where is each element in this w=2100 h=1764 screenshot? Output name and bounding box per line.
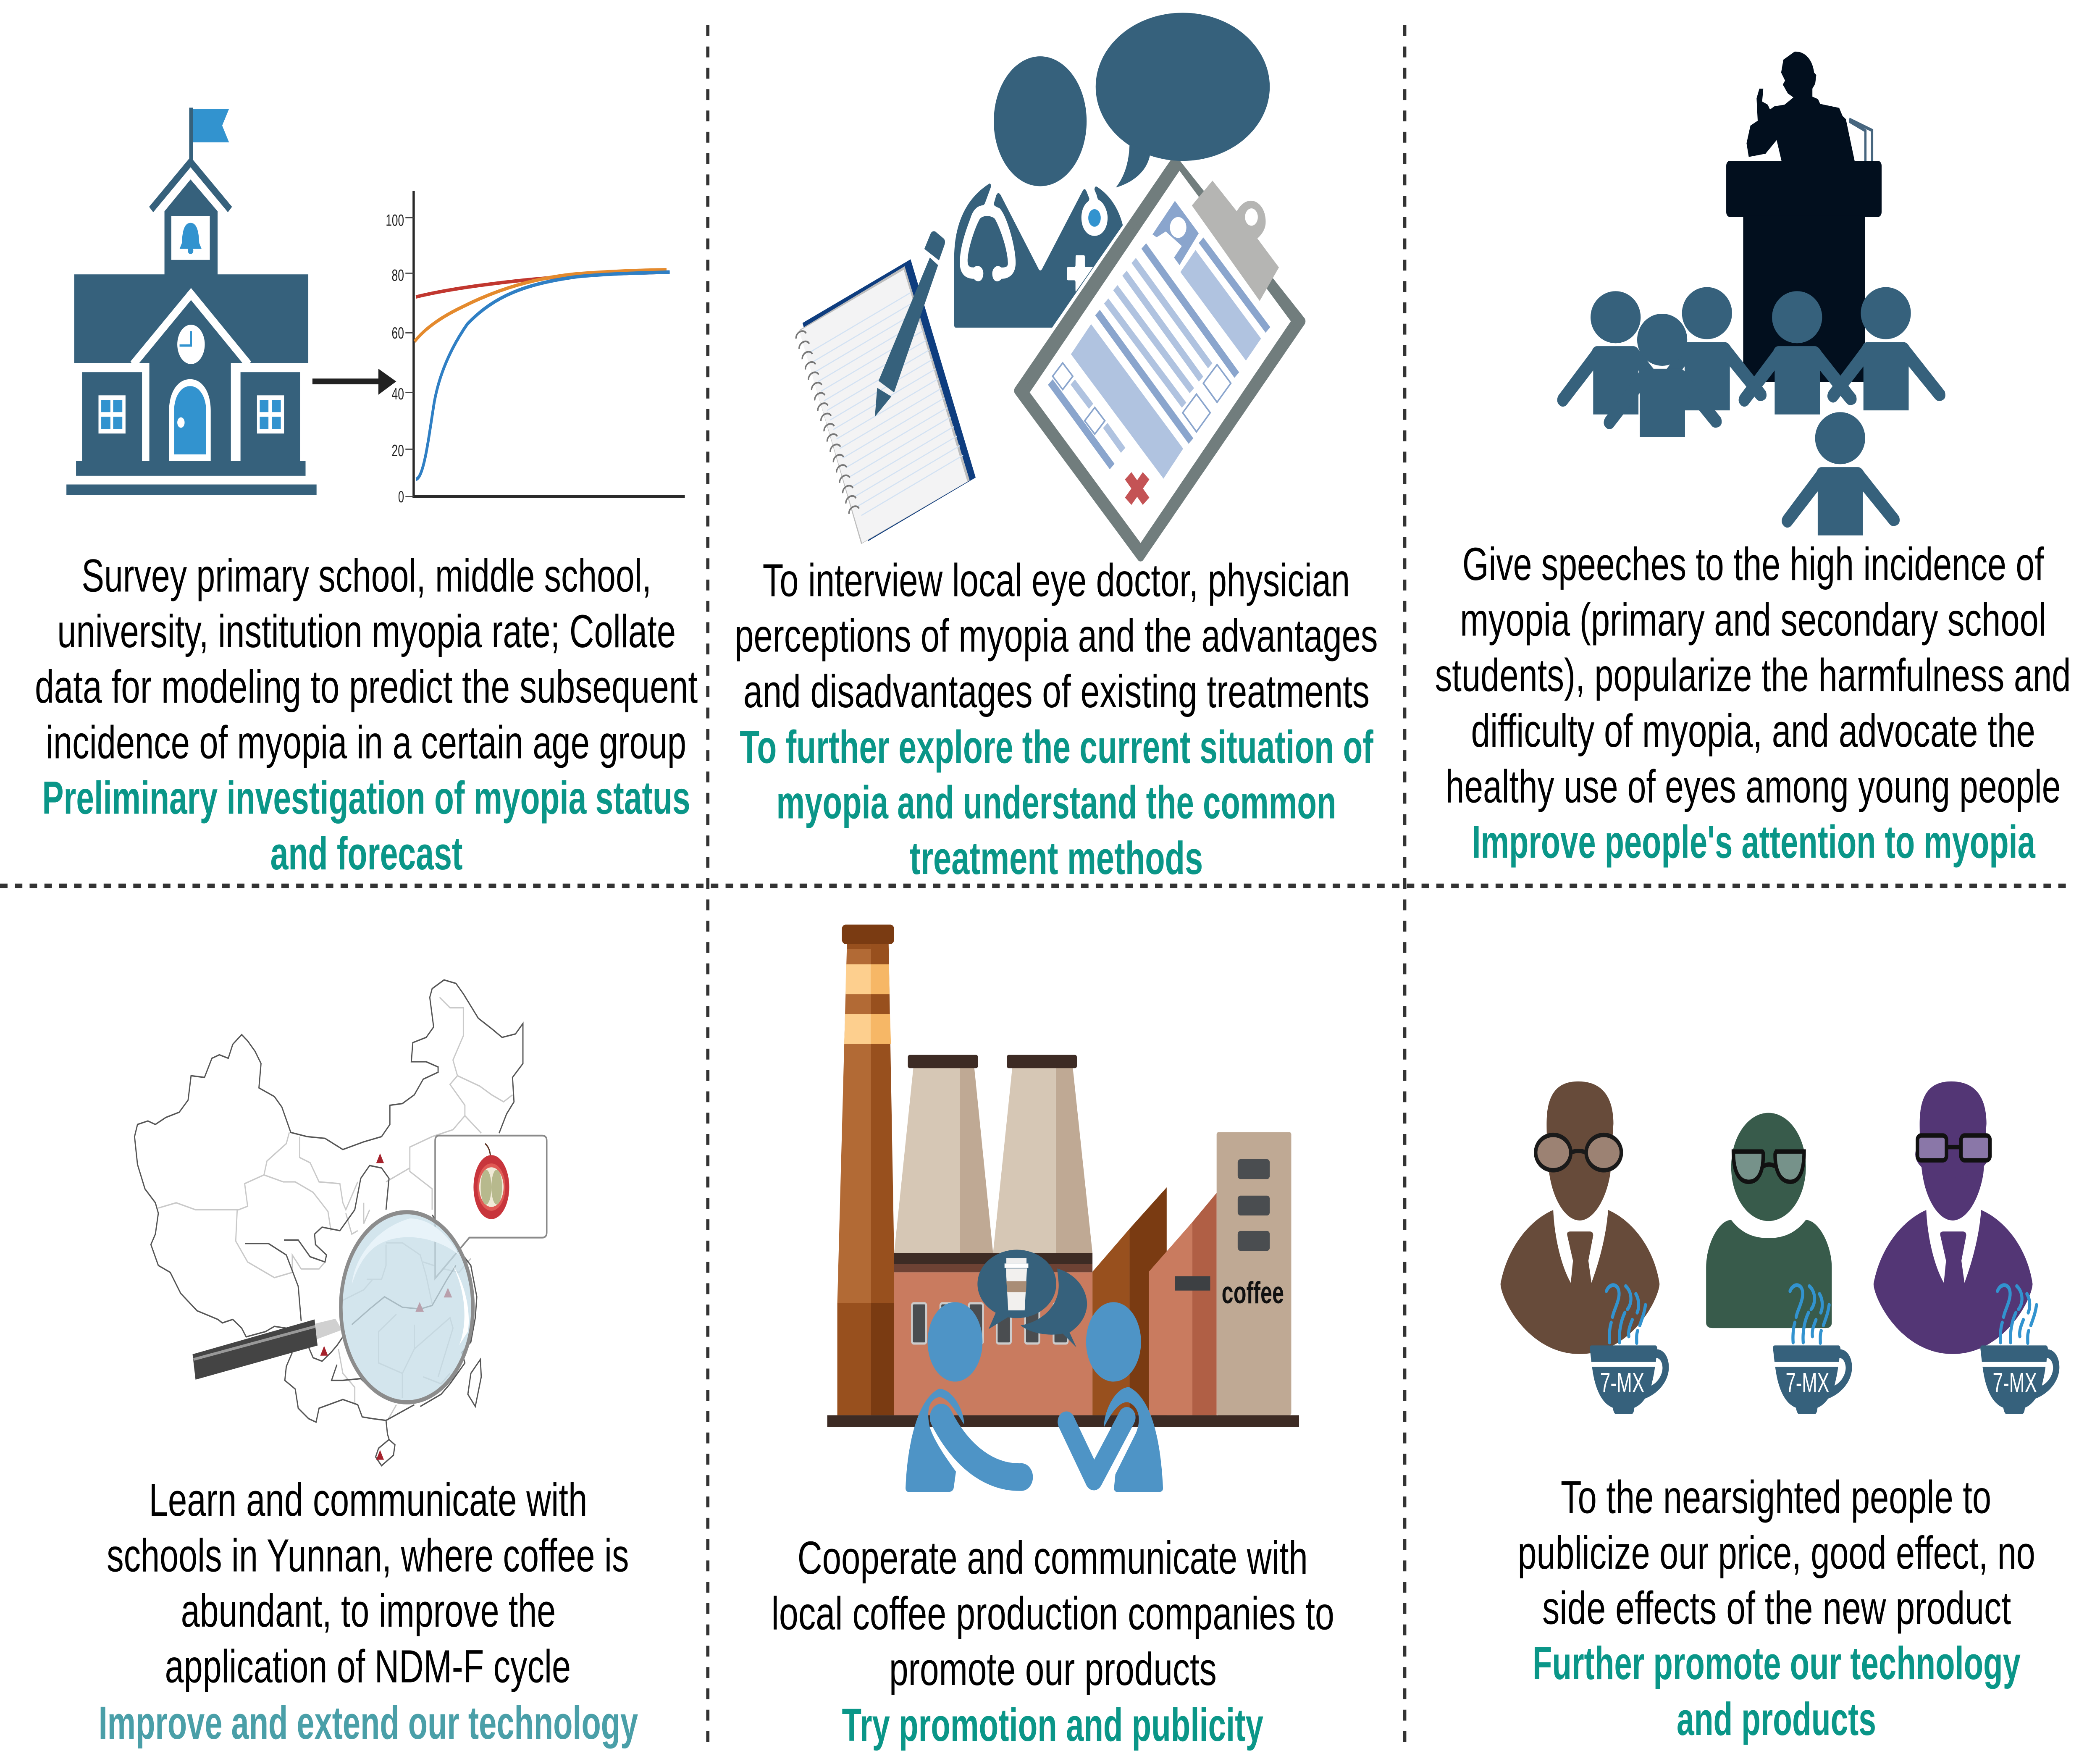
text: panel 3 description: Give speeches to the high incidence of [1462, 538, 2044, 590]
text: panel 3 description: students), popularize the harmfulness and [1435, 650, 2071, 701]
illustration: school building [66, 108, 317, 495]
text: panel 5 description: local coffee production companies to [772, 1588, 1334, 1640]
icon: cup shapes with labels: 7-MX [1600, 1368, 1644, 1399]
icon: steam [1606, 1285, 2037, 1343]
icon: 7-MX coffee cups [1590, 1285, 2059, 1414]
panel: school survey [35, 108, 698, 879]
icon: speaker at lectern [1726, 52, 1882, 382]
panel: coffee company cooperation [772, 925, 1334, 1751]
text: panel 6 goal: Further promote our technology [1533, 1638, 2021, 1689]
text: panel 3 description: difficulty of myopia, and advocate the [1471, 705, 2035, 757]
icon: cup shapes with labels: 7-MX [1785, 1368, 1830, 1399]
text: panel 6 goal: and products [1677, 1693, 1876, 1745]
text: panel 4 description [107, 1474, 629, 1693]
text: panel 5 description [772, 1532, 1334, 1696]
text: panel 6 description: To the nearsighted people to [1561, 1472, 1991, 1523]
text: panel 2 goal: treatment methods [910, 832, 1203, 884]
text: panel 3 description: healthy use of eyes among young people [1446, 761, 2061, 813]
text: panel 4 description: application of NDM-F cycle [165, 1641, 571, 1693]
text: panel 2 description [735, 555, 1378, 718]
icon: cup shapes with labels [1590, 1345, 2059, 1414]
text: panel 6 goal [1533, 1638, 2021, 1745]
callout: coffee fruit [435, 1136, 547, 1278]
text: panel 2 description: To interview local eye doctor, physician [763, 555, 1350, 606]
text: panel 5 goal: Try promotion and publicity [842, 1699, 1263, 1751]
icon: speech bubble [1096, 13, 1270, 188]
text: panel 5 description: Cooperate and communicate with [798, 1532, 1308, 1584]
icon: notebook and pen [796, 231, 976, 544]
chart: myopia forecast curves [386, 191, 685, 506]
text: panel 5 description: promote our products [889, 1643, 1217, 1696]
text: panel 1 description: Survey primary school, middle school, [81, 550, 651, 602]
chart: myopia forecast curves: 80 [392, 267, 404, 284]
icon: cup shapes with labels: 7-MX [1993, 1368, 2037, 1399]
chart: myopia forecast curves: 60 [392, 325, 404, 342]
text: panel 2 goal: To further explore the current situation of [740, 722, 1373, 773]
text: panel 2 description: and disadvantages of existing treatments [743, 666, 1370, 718]
text: panel 2 description: perceptions of myopia and the advantages [735, 610, 1378, 662]
icon: two people talking over coffee [906, 1250, 1163, 1492]
text: panel 3 description: myopia (primary and secondary school [1460, 594, 2046, 646]
illustration: coffee factory: coffee [1222, 1276, 1284, 1310]
text: panel 2 goal: myopia and understand the common [776, 777, 1336, 829]
text: panel 1 goal [42, 772, 690, 879]
text: panel 6 description: publicize our price, good effect, no [1517, 1527, 2035, 1579]
text: panel 1 description [35, 550, 698, 769]
icon: green person with glasses [1706, 1113, 1832, 1328]
arrow: school to chart [312, 369, 396, 395]
text: panel 4 description: abundant, to improve the [181, 1585, 556, 1637]
text: panel 3 goal: Improve people's attention to myopia [1472, 816, 2036, 868]
panel: public speech [1435, 52, 2071, 868]
text: panel 1 description: incidence of myopia in a certain age group [46, 717, 686, 769]
text: panel 6 description: side effects of the new product [1542, 1583, 2011, 1634]
icon: clipboard with medical form [1018, 161, 1302, 557]
text: panel 6 description [1517, 1472, 2035, 1634]
icon: audience [1557, 287, 1945, 536]
panel: doctor interview [735, 13, 1378, 884]
illustration: coffee factory [827, 925, 1299, 1427]
chart: myopia forecast curves: 100 [386, 212, 404, 229]
icon: doctor [954, 56, 1123, 328]
map: China outline [134, 980, 523, 1466]
panel: Yunnan schools [99, 980, 638, 1749]
text: panel 4 goal: Improve and extend our technology [99, 1697, 638, 1749]
text: panel 4 description: Learn and communicate with [149, 1474, 587, 1526]
panel: nearsighted people [1501, 1082, 2059, 1745]
text: panel 1 description: data for modeling to predict the subsequent [35, 661, 698, 713]
text: panel 1 description: university, institution myopia rate; Collate [57, 606, 676, 657]
text: panel 3 description [1435, 538, 2071, 813]
text: panel 2 goal [740, 722, 1373, 884]
chart: myopia forecast curves: 40 [392, 386, 404, 403]
text: panel 4 description: schools in Yunnan, where coffee is [107, 1530, 629, 1582]
icon: magnifying glass [192, 1212, 473, 1402]
chart: myopia forecast curves: 20 [392, 442, 404, 460]
text: panel 1 goal: and forecast [270, 828, 463, 879]
icon: purple person with square glasses [1874, 1082, 2032, 1354]
icon: brown person with round glasses [1501, 1082, 1659, 1354]
text: panel 1 goal: Preliminary investigation of myopia status [42, 772, 690, 824]
chart: myopia forecast curves: 0 [398, 488, 404, 506]
